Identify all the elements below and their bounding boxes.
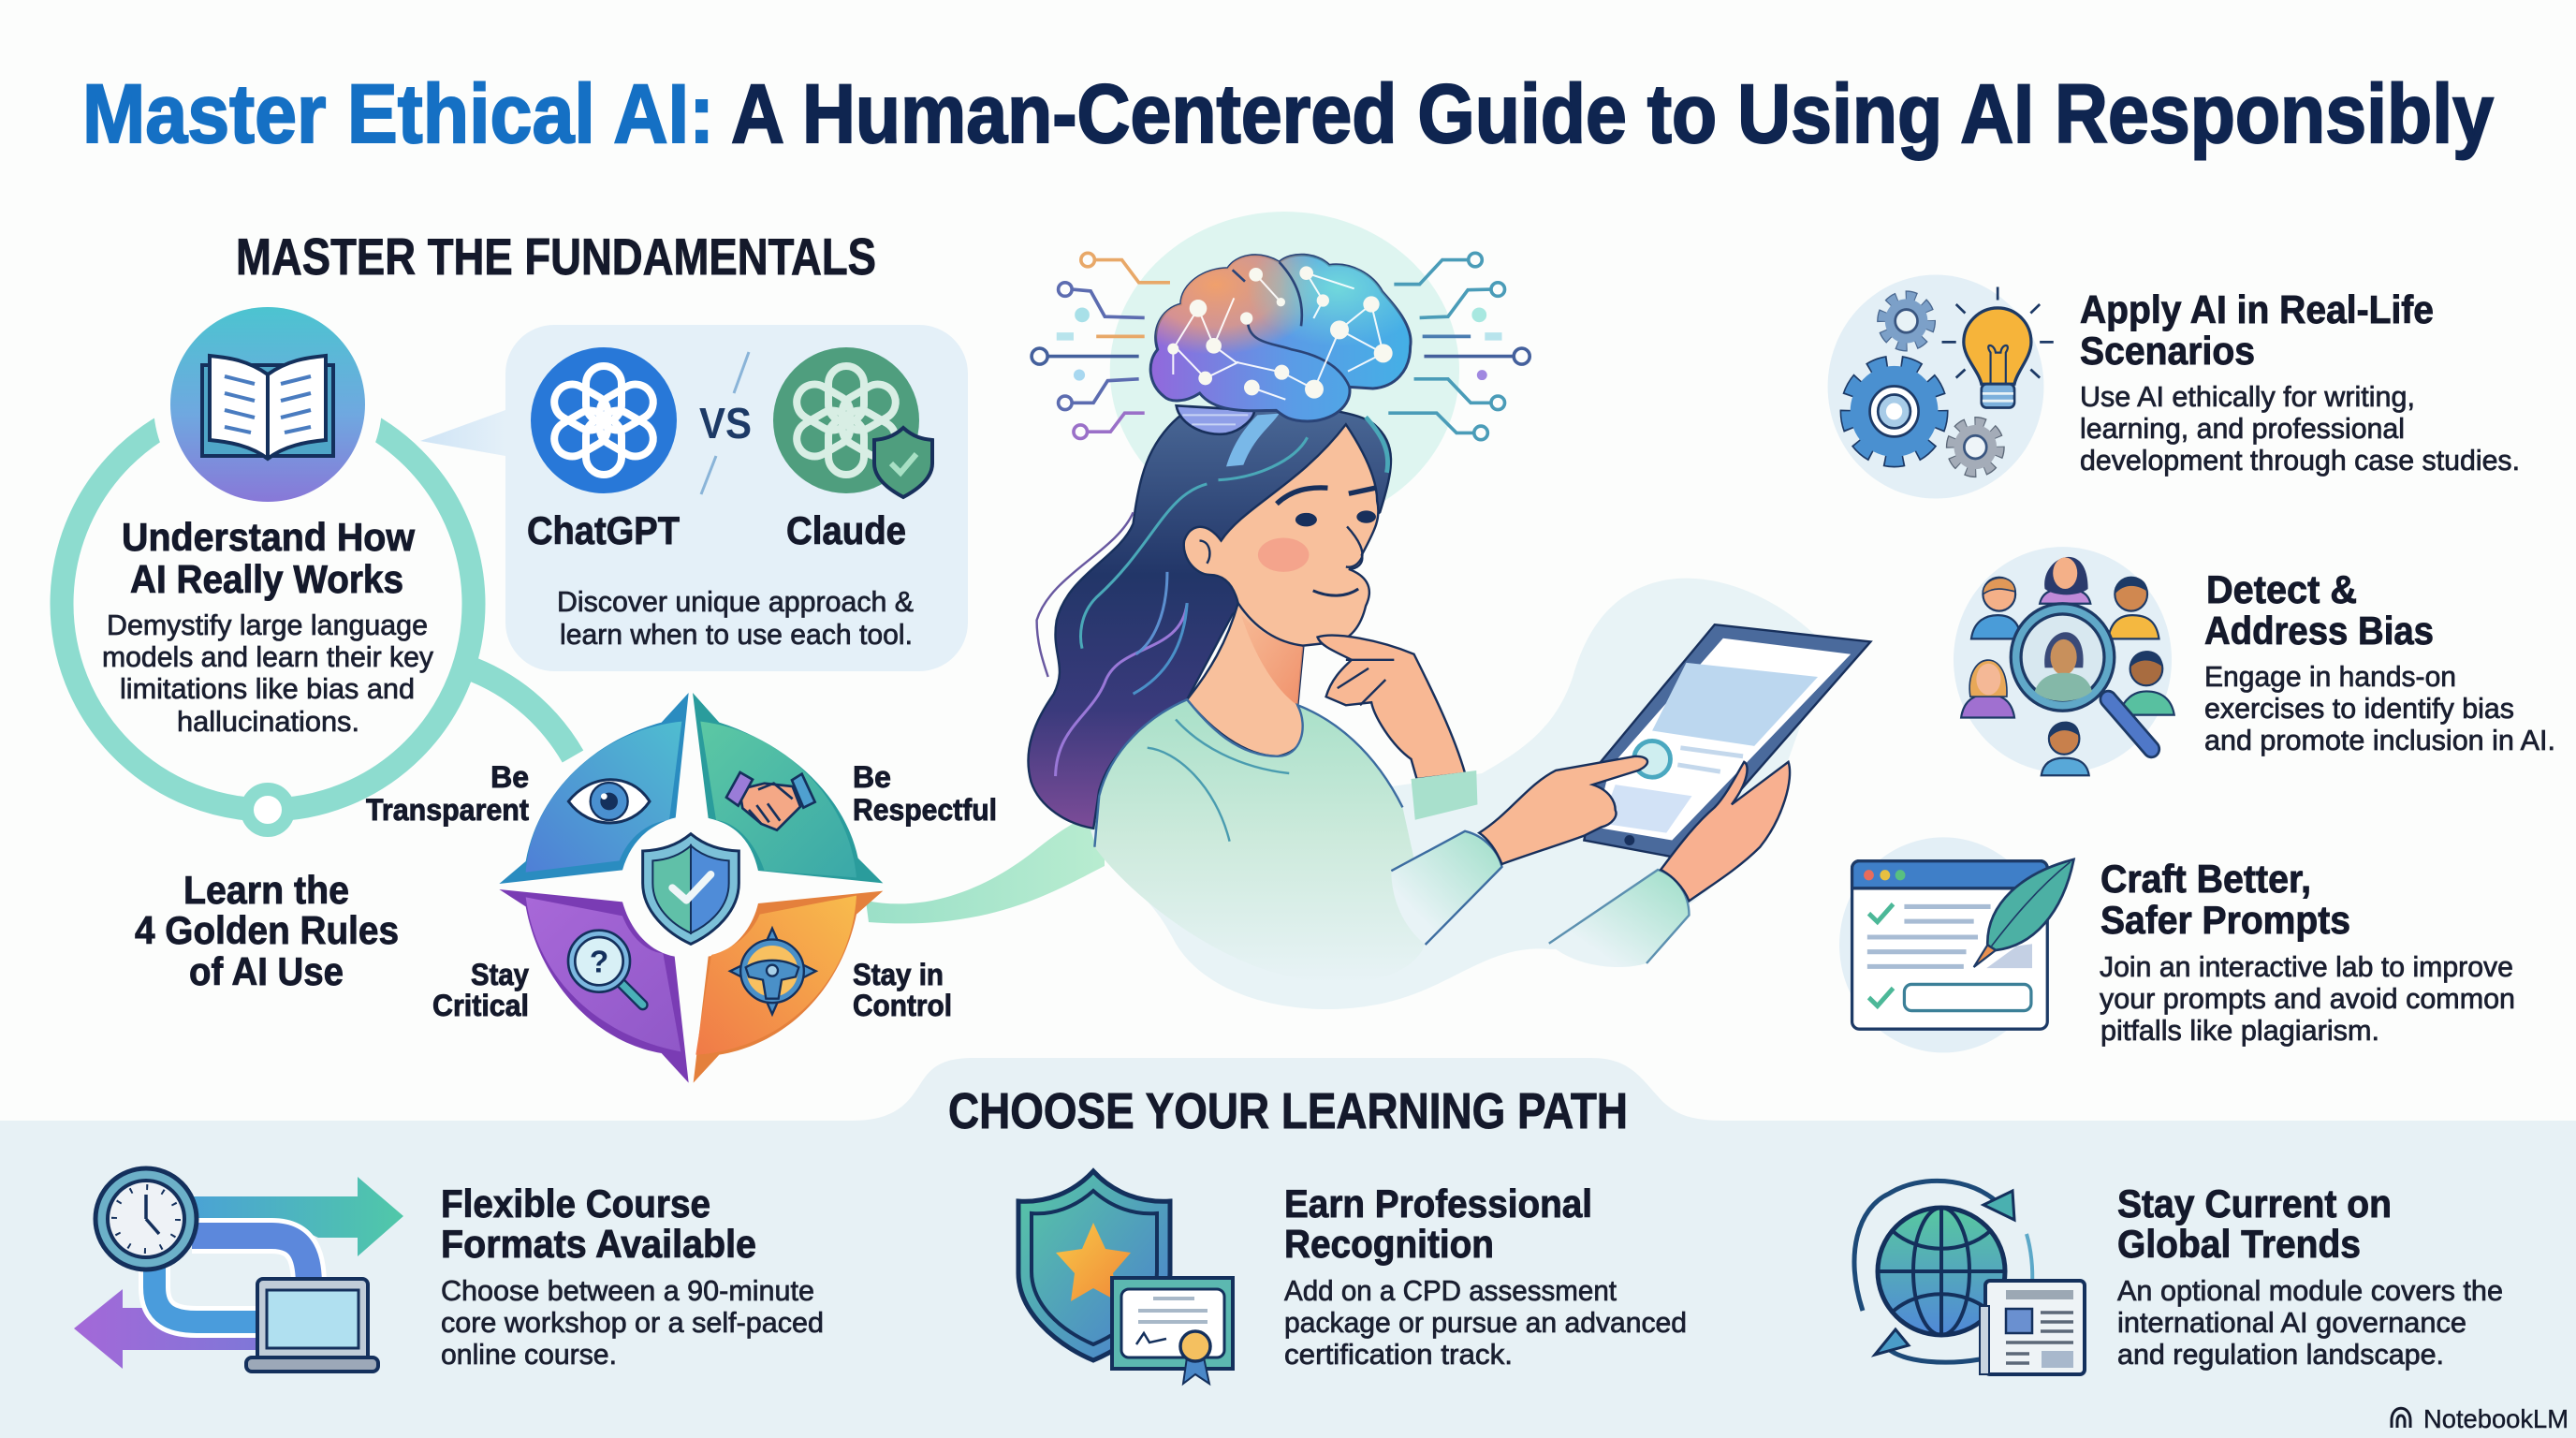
text: professional recognition <box>1284 1181 1687 1371</box>
compass labels: Respectful <box>853 793 997 827</box>
text: global trends: Global Trends <box>2117 1222 2361 1266</box>
panel: learning path band <box>0 1058 2576 1438</box>
vs label: VS <box>699 399 752 448</box>
neural nodes <box>1167 266 1393 399</box>
icon: magnifier <box>572 933 643 1005</box>
icon: steering wheel <box>730 929 816 1014</box>
thinking hand <box>1318 636 1477 820</box>
mint halo <box>1110 212 1459 529</box>
pointing hand <box>1479 756 1647 864</box>
text: craft prompts <box>2100 857 2515 1047</box>
text: craft prompts: Safer Prompts <box>2100 898 2350 942</box>
icon: open book <box>154 290 382 519</box>
text: professional recognition: package or pursue an advanced <box>1284 1306 1687 1339</box>
quadrant: critical <box>499 889 689 1083</box>
text: understand how AI works: AI Really Works <box>130 557 403 601</box>
circuit traces right <box>1388 253 1530 440</box>
text: craft prompts: pitfalls like plagiarism. <box>2100 1014 2379 1047</box>
tablet <box>1584 624 1870 858</box>
icon: eye <box>568 780 650 823</box>
icon: handshake <box>726 772 815 830</box>
comparison text: Discover unique approach & <box>557 585 914 618</box>
text: apply AI <box>2080 287 2520 477</box>
tool names <box>527 508 906 552</box>
person 3 <box>2108 577 2159 638</box>
quadrant: respectful <box>693 693 883 883</box>
text: flexible formats: core workshop or a self-paced <box>441 1306 824 1339</box>
clock <box>95 1168 197 1269</box>
compass: four golden rules <box>499 693 883 1083</box>
icon: shield <box>643 834 739 944</box>
text: flexible formats: online course. <box>441 1338 617 1371</box>
icon: globe and news <box>1854 1181 2085 1374</box>
comparison text <box>557 585 914 651</box>
swoosh connector <box>866 810 1105 923</box>
compass labels: Be <box>490 760 529 794</box>
panel: tool comparison <box>420 325 968 671</box>
text: understand how AI works <box>102 515 433 738</box>
shirt <box>1094 699 1426 983</box>
text: apply AI: Scenarios <box>2080 329 2255 373</box>
icon: magnifier: ? <box>590 945 608 979</box>
text: detect bias: exercises to identify bias <box>2204 692 2514 725</box>
text: apply AI: learning, and professional <box>2080 412 2405 445</box>
text: apply AI: development through case studies. <box>2080 444 2520 477</box>
text: detect bias: Engage in hands-on <box>2204 660 2456 693</box>
tool names: ChatGPT <box>527 508 680 552</box>
text: flexible formats: Flexible Course <box>441 1181 710 1225</box>
small gear bottom <box>1951 422 1999 472</box>
person 4 <box>1961 660 2014 717</box>
text: craft prompts: Craft Better, <box>2100 857 2311 901</box>
text: global trends <box>2117 1181 2503 1371</box>
icon: shield and certificate <box>1018 1171 1233 1384</box>
icon: apply AI gears and bulb <box>1828 275 2054 499</box>
text: golden rules <box>135 868 399 993</box>
heading: choose your learning path: CHOOSE YOUR LEARNING PATH <box>948 1083 1628 1139</box>
text: global trends: Stay Current on <box>2117 1181 2392 1225</box>
icon: bias detection group <box>1954 547 2174 775</box>
text: professional recognition: Add on a CPD assessment <box>1284 1274 1617 1307</box>
text: global trends: international AI governance <box>2117 1306 2466 1339</box>
text: craft prompts: Join an interactive lab to improve <box>2100 950 2513 983</box>
text: understand how AI works: limitations like bias and <box>120 672 415 705</box>
icon: prompt window and quill <box>1839 837 2073 1052</box>
connector ring <box>62 398 573 830</box>
icon: Claude <box>773 347 932 497</box>
quadrant: transparent <box>499 693 689 884</box>
text: understand how AI works: models and learn their key <box>102 640 433 673</box>
text: flexible formats: Choose between a 90-minute <box>441 1274 814 1307</box>
circuit traces left <box>1032 253 1170 438</box>
text: professional recognition: certification track. <box>1284 1338 1513 1371</box>
person 1 <box>1971 578 2021 638</box>
compass labels <box>366 760 997 1022</box>
neural links <box>1173 273 1383 400</box>
title: Master Ethical AI: <box>82 66 714 160</box>
person 6 <box>2042 722 2089 775</box>
text: global trends: and regulation landscape. <box>2117 1338 2444 1371</box>
hair strands <box>1037 417 1388 776</box>
small gear top <box>1882 296 1931 346</box>
quadrant: control <box>694 891 883 1083</box>
text: craft prompts: your prompts and avoid common <box>2100 982 2515 1015</box>
laptop <box>246 1279 378 1372</box>
text: detect bias <box>2204 567 2555 756</box>
compass labels: Stay in <box>853 958 944 991</box>
neck shadow <box>1241 614 1303 705</box>
sleeve front <box>1391 831 1501 945</box>
tool names: Claude <box>786 508 906 552</box>
text: flexible formats <box>441 1181 824 1371</box>
facial features <box>1199 488 1376 646</box>
vs label <box>699 352 752 494</box>
comparison text: learn when to use each tool. <box>560 618 913 651</box>
text: understand how AI works: Demystify large language <box>107 609 428 641</box>
big gear <box>1848 363 1940 460</box>
heading: master the fundamentals: MASTER THE FUNDAMENTALS <box>236 227 876 286</box>
quill <box>1974 859 2073 967</box>
compass hub <box>624 815 757 948</box>
magnifier <box>2016 609 2151 749</box>
text: understand how AI works: Understand How <box>122 515 415 559</box>
text: professional recognition: Earn Professional <box>1284 1181 1592 1225</box>
sleeve back <box>1549 870 1689 967</box>
text: apply AI: Apply AI in Real-Life <box>2080 287 2434 331</box>
text: golden rules: Learn the <box>183 868 349 912</box>
text: golden rules: 4 Golden Rules <box>135 908 399 952</box>
compass labels: Critical <box>432 989 529 1022</box>
compass labels: Transparent <box>366 793 529 827</box>
compass labels: Be <box>853 760 891 794</box>
text: detect bias: Address Bias <box>2204 609 2434 653</box>
logo: NotebookLM: NotebookLM <box>2423 1404 2569 1433</box>
person 2 <box>2040 557 2090 604</box>
icon: neural brain <box>1150 255 1411 466</box>
text: detect bias: Detect & <box>2206 567 2357 611</box>
holding hand <box>1661 762 1790 901</box>
compass labels: Control <box>853 989 952 1022</box>
icon: flexible formats <box>74 1168 403 1372</box>
certificate <box>1112 1278 1233 1384</box>
illustration: person with AI brain <box>1028 212 1870 1009</box>
bulb <box>1942 286 2054 407</box>
text: understand how AI works: hallucinations. <box>177 705 359 738</box>
text: golden rules: of AI Use <box>189 949 344 993</box>
icon: ChatGPT <box>531 347 677 493</box>
hair <box>1028 406 1391 829</box>
text: apply AI: Use AI ethically for writing, <box>2080 380 2415 413</box>
compass labels: Stay <box>471 958 529 991</box>
pale blob <box>1090 579 1828 1009</box>
shirt outline and folds <box>1094 699 1402 847</box>
text: global trends: An optional module covers the <box>2117 1274 2503 1307</box>
text: detect bias: and promote inclusion in AI. <box>2204 724 2555 756</box>
face and neck <box>1184 424 1378 756</box>
text: flexible formats: Formats Available <box>441 1222 756 1266</box>
newspaper <box>1980 1281 2085 1374</box>
person 5 <box>2118 651 2174 715</box>
text: professional recognition: Recognition <box>1284 1222 1494 1266</box>
